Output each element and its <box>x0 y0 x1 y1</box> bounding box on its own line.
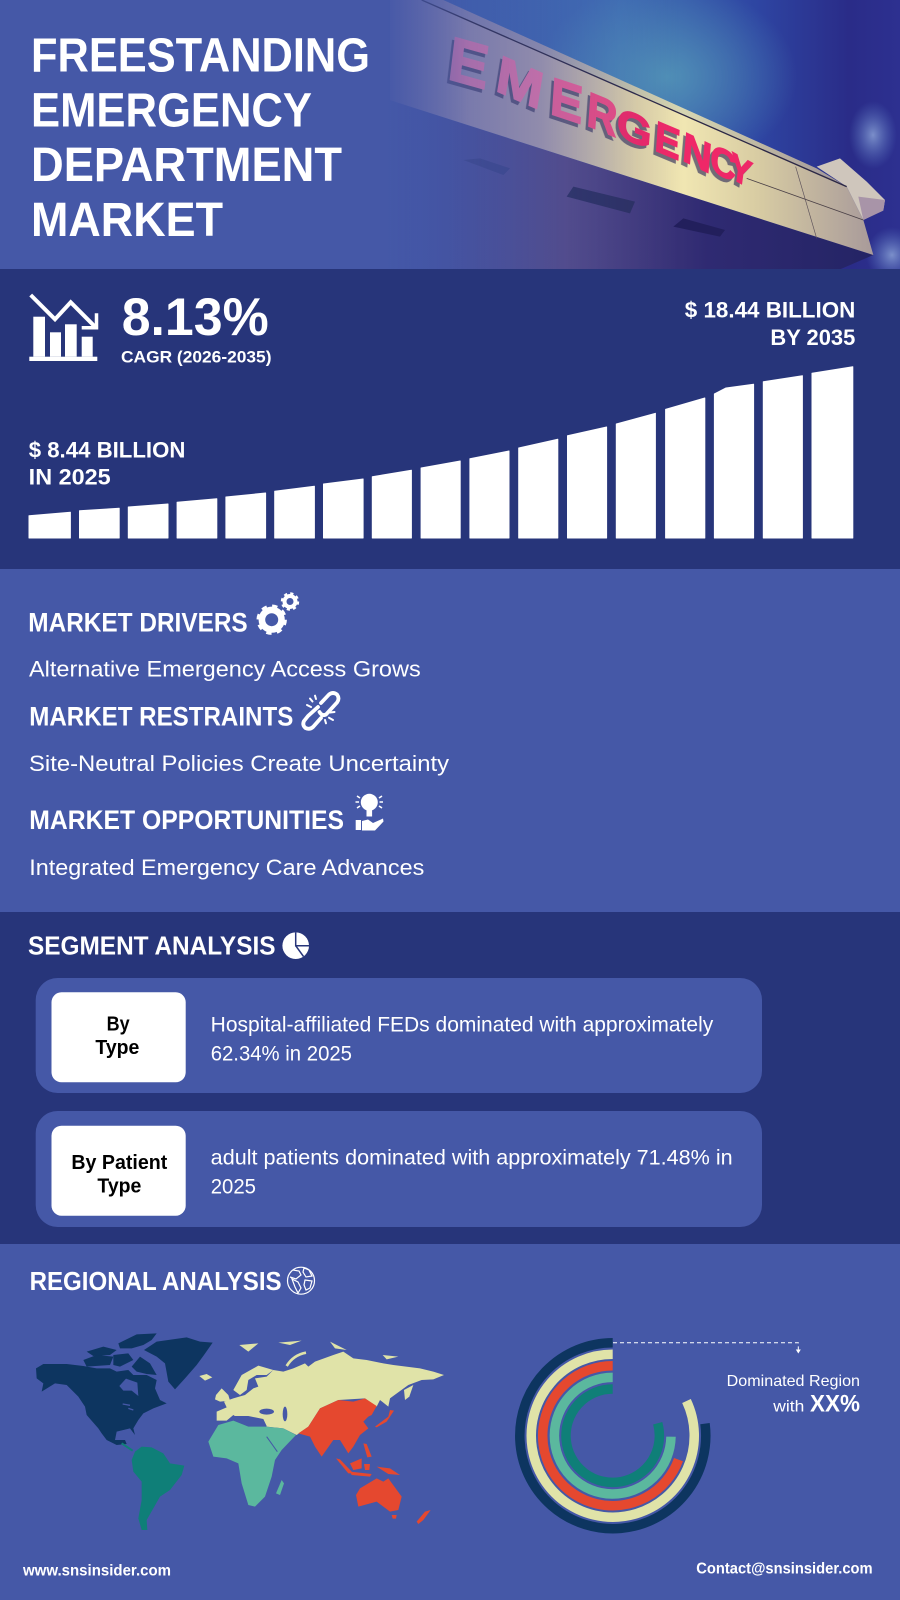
icon: globe <box>288 1267 314 1294</box>
end value label: BY 2035 <box>770 325 855 350</box>
text: by patient type finding: 2025 <box>211 1175 256 1198</box>
heading: market restraints: MARKET RESTRAINTS <box>29 702 293 732</box>
callout: dominated region: with <box>772 1399 804 1416</box>
region: North America <box>36 1333 213 1451</box>
text: driver: Alternative Emergency Access Grows <box>29 657 421 682</box>
callout: dominated region: XX% <box>810 1391 860 1418</box>
heading: segment analysis: SEGMENT ANALYSIS <box>28 930 276 960</box>
footer: contact: Contact@snsinsider.com <box>696 1560 873 1577</box>
region: Asia Pacific <box>298 1398 431 1524</box>
label box: by type: By <box>107 1014 130 1036</box>
end value label: $ 18.44 BILLION <box>685 298 855 323</box>
radial bar chart <box>520 1343 706 1529</box>
text: opportunity: Integrated Emergency Care Advances <box>29 855 424 880</box>
label box: by patient type: Type <box>97 1175 141 1197</box>
region: Africa and Middle East <box>208 1421 296 1507</box>
CAGR label: CAGR (2026-2035) <box>121 348 272 367</box>
title: EMERGENCY <box>31 85 312 138</box>
icon: gears <box>258 594 298 633</box>
heading: market opportunities: MARKET OPPORTUNITIES <box>29 805 344 835</box>
heading: market drivers: MARKET DRIVERS <box>28 608 248 638</box>
icon: hand with light bulb <box>356 794 384 830</box>
label box: by type: Type <box>95 1037 139 1059</box>
panel: regional analysis <box>0 1244 900 1600</box>
header photo: emergency sign: R <box>585 82 619 148</box>
icon: chart with falling arrow <box>29 295 97 361</box>
label box: by type <box>52 992 186 1082</box>
header photo: emergency sign: E <box>549 66 585 135</box>
label box: by patient type <box>52 1126 186 1216</box>
panel: header <box>0 0 900 283</box>
text: by patient type finding <box>211 1146 733 1198</box>
title <box>31 30 370 247</box>
panel: market size <box>0 269 900 569</box>
start value label <box>29 438 185 489</box>
header photo: emergency sign <box>388 0 900 283</box>
CAGR value: 8.13% <box>122 288 269 347</box>
label box: by patient type: By Patient <box>71 1152 168 1174</box>
end value label <box>685 298 855 350</box>
header photo: emergency sign: M <box>493 44 548 121</box>
bar chart <box>29 367 853 538</box>
header photo: emergency sign: Y <box>727 144 755 197</box>
region: South America <box>132 1447 184 1530</box>
dashed leader arrow <box>613 1343 801 1354</box>
callout: dominated region: Dominated Region <box>727 1373 860 1390</box>
text: by type finding: Hospital-affiliated FEDs dominated with approximately <box>211 1014 714 1037</box>
header photo: emergency sign: N <box>681 124 714 184</box>
text: by type finding <box>211 1014 714 1066</box>
header photo: emergency sign: G <box>615 98 654 159</box>
region: Europe and North Asia <box>199 1341 444 1435</box>
icon: pie chart <box>282 932 309 959</box>
title: DEPARTMENT <box>31 139 342 192</box>
world map <box>36 1333 444 1530</box>
text: restraint: Site-Neutral Policies Create Uncertainty <box>29 751 449 776</box>
title: MARKET <box>31 194 223 247</box>
title: FREESTANDING <box>31 30 370 83</box>
heading: regional analysis: REGIONAL ANALYSIS <box>30 1266 282 1296</box>
panel: segment analysis <box>0 912 900 1244</box>
header photo: emergency sign: E <box>653 111 682 170</box>
text: by patient type finding: adult patients dominated with approximately 71.48% in <box>211 1146 733 1169</box>
callout: dominated region <box>727 1373 860 1418</box>
start value label: IN 2025 <box>29 464 111 489</box>
card: by type <box>36 978 762 1093</box>
footer: website: www.snsinsider.com <box>22 1562 171 1579</box>
header photo: emergency sign: C <box>709 135 738 192</box>
header photo: emergency sign: E <box>445 24 493 102</box>
text: by type finding: 62.34% in 2025 <box>211 1043 352 1066</box>
icon: broken chain <box>303 693 338 729</box>
panel: market dynamics <box>0 569 900 912</box>
card: by patient type <box>36 1111 762 1227</box>
start value label: $ 8.44 BILLION <box>29 438 185 463</box>
